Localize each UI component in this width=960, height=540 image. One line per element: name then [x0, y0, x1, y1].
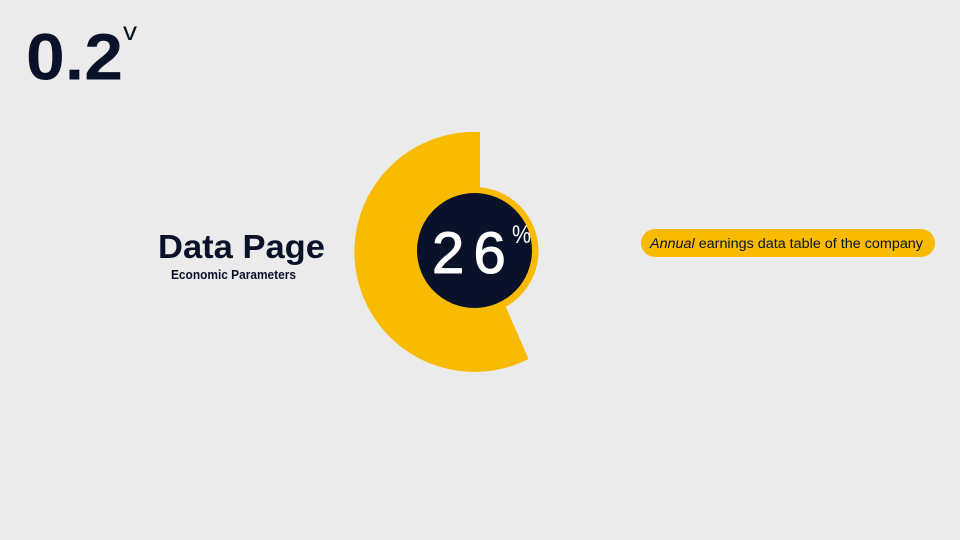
version label: 0.2	[26, 20, 123, 94]
donut chart: 26 percent: 6	[474, 221, 506, 286]
callout: annual earnings pill: Annual earnings data table of the company	[649, 236, 923, 251]
callout: annual earnings pill	[641, 229, 935, 257]
heading: data page: Economic Parameters	[171, 268, 296, 282]
heading: data page	[158, 229, 325, 282]
donut chart: 26 percent: 2	[432, 221, 464, 286]
version label: v	[123, 18, 138, 46]
donut chart: 26 percent: %	[512, 221, 531, 249]
donut chart: 26 percent	[354, 132, 538, 372]
heading: data page: Data Page	[158, 229, 325, 266]
